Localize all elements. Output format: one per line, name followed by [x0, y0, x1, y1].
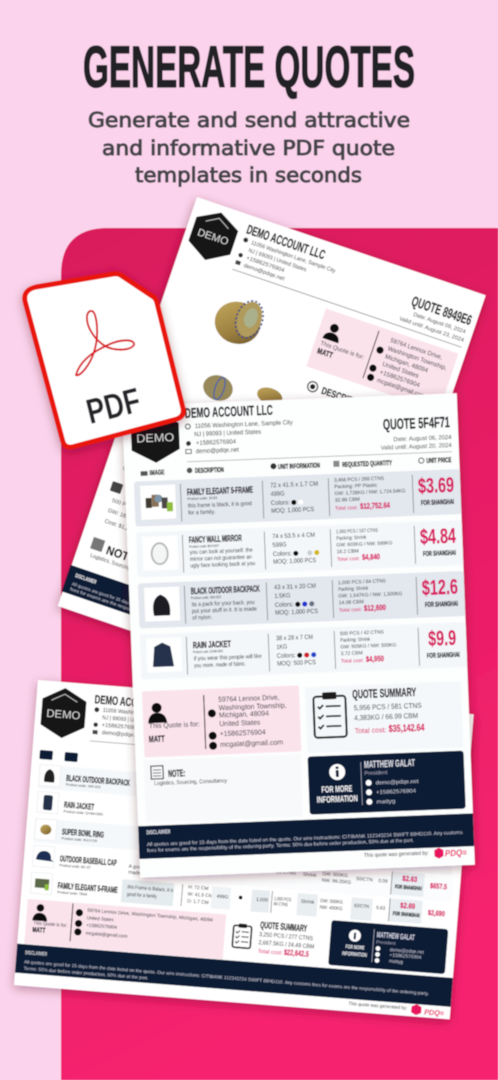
- recipient box: Washington Township,: [387, 345, 448, 372]
- row: cap: $2.63: [402, 874, 418, 884]
- row: cap: GW: 500KG: [322, 871, 348, 879]
- row: family elegant frame: $3.69: [418, 474, 454, 498]
- row: family frame: good for a family: [127, 892, 157, 900]
- footer credit: PDQ≡: [424, 1007, 445, 1018]
- quantity column fragments: GW: 18.5KG: [107, 508, 139, 524]
- row: family frame: 84 CTNS: [274, 901, 288, 908]
- row: family elegant frame: 499G: [270, 491, 285, 498]
- contact card: MATTHEW GALAT: [377, 930, 415, 942]
- row: black outdoor backpack: 1,000 PCS / 84 CTNS: [338, 578, 387, 586]
- row: backpack: BLACK OUTDOOR BACKPACK: [66, 773, 131, 788]
- note: Logistics, Sourcing, Consultancy: [154, 778, 227, 787]
- quote summary: $35,142.64: [388, 723, 425, 735]
- row: family elegant frame: FAMILY ELEGANT 5-FRAME: [187, 485, 253, 497]
- row: fancy wall mirror: [136, 520, 463, 578]
- disclaimer band: Terms: 50% due before order production, 50% due at the port.: [23, 966, 148, 981]
- row: black outdoor backpack: its a pack for your back. you: [192, 600, 255, 608]
- quote summary: 4,383KG / 66.99 CBM: [354, 711, 418, 722]
- row: fancy wall mirror: 74 x 53.5 x 4 CM: [272, 532, 315, 540]
- row: rain jacket: RAIN JACKET: [64, 799, 95, 812]
- disclaimer band: fees for exams are the responsibility of the ordering party.: [69, 586, 189, 631]
- company details: demo@pdqe.net: [243, 263, 286, 283]
- row: rain jacket: 3.72 CBM: [341, 650, 363, 657]
- row: black outdoor backpack: Packing: Shrink: [338, 586, 369, 593]
- row: rain jacket: RAIN JACKET: [193, 639, 231, 650]
- row: rain jacket: GW: 505KG / NW: 500KG: [340, 642, 397, 650]
- row: family frame: 499G: [216, 894, 229, 901]
- row: cap: 28 CTNS: [276, 869, 296, 877]
- disclaimer band: DISCLAIMER: [25, 950, 47, 958]
- row: family elegant frame: FOR SHANGHAI: [421, 499, 454, 507]
- subtitle: [88, 108, 410, 187]
- row: fancy wall mirror: 1,000 PCS / 167 CTNS: [336, 528, 379, 535]
- company details: +15862576904: [196, 438, 237, 447]
- contact card: INFORMATION: [317, 793, 358, 805]
- row: family elegant frame: MOQ: 1,000 PCS: [271, 506, 314, 515]
- quote summary: QUOTE SUMMARY: [352, 685, 416, 701]
- row: black outdoor backpack: of nylon.: [192, 615, 213, 622]
- contact card: INFORMATION: [342, 951, 367, 959]
- row: rain jacket: [37, 791, 105, 818]
- row: cap: NW: 99.25KG: [321, 878, 352, 886]
- company details: DEMO ACCOUNT LLC: [185, 402, 273, 421]
- row: rain jacket: 1KG: [276, 644, 288, 651]
- recipient box: +15862576904: [379, 369, 421, 389]
- company details: [92, 692, 189, 743]
- company details: DEMO ACCOUNT LLC: [94, 692, 177, 713]
- front quote document 5F4F71: [122, 393, 475, 878]
- quantity column fragments: 500 PCS / 84 CTNS: [129, 445, 179, 467]
- row: black outdoor backpack: 43 x 31 x 20 CM: [274, 583, 316, 591]
- row: family elegant frame: [134, 469, 461, 527]
- row: family frame: Shrink: [301, 899, 315, 906]
- row: ring: SUPER BOWL RING: [62, 826, 104, 840]
- row: fancy wall mirror: ugly face looking back at you: [190, 561, 255, 569]
- row: rain jacket: Packing: Shrink: [340, 637, 371, 644]
- recipient box: mcgalat@gmail.com: [85, 931, 128, 940]
- row: black outdoor backpack: MOQ: 1,000 PCS: [275, 608, 318, 617]
- recipient box: Michigan, 48094: [219, 709, 269, 720]
- logo: [130, 410, 180, 464]
- icon: PDF badge: [25, 274, 183, 447]
- description header: [306, 380, 371, 412]
- row: cap: [32, 843, 454, 902]
- quantity column fragments: Cost: $1,250: [122, 466, 154, 482]
- recipient box: This Quote is for:: [319, 341, 365, 361]
- row: cap: OUTDOOR BASEBALL CAP: [59, 853, 117, 868]
- recipient box: +15862576904: [219, 727, 266, 738]
- contact card: [308, 751, 466, 815]
- row: black outdoor backpack: Product code: JKK-023: [191, 595, 221, 600]
- note: Logistics, Sourcing, Consultancy: [89, 553, 160, 582]
- row: family elegant frame: for a family.: [188, 509, 216, 517]
- quote number: Valid until: August 20, 2024: [381, 443, 453, 452]
- company details: 11056 Washington Lane, Sample City: [195, 419, 294, 430]
- subtitle: templates in seconds: [135, 163, 362, 187]
- quote summary: $22,642.5: [284, 948, 310, 959]
- row: rain jacket: 38 x 28 x 7 CM: [276, 634, 313, 642]
- disclaimer band: DISCLAIMER: [146, 829, 171, 836]
- row: family frame: W: 41.5 CM: [187, 891, 213, 899]
- row: family frame: 62/CTN: [354, 903, 370, 910]
- recipient box: +15862576904: [86, 923, 118, 931]
- row: family elegant frame: Packing: PP Plastic: [334, 483, 378, 490]
- row: family frame: this Frame is Balack, it is: [127, 884, 174, 894]
- row: family frame: FOR SHANGHAI: [392, 911, 420, 919]
- recipient box: [24, 899, 226, 959]
- quote summary: [305, 681, 463, 753]
- row: cap: A good hat for outdoors: [128, 864, 181, 874]
- row: fancy wall mirror: mirror can not guarantee an: [190, 555, 252, 563]
- contact card: President: [376, 939, 397, 946]
- row: cap: 50/CTN: [356, 876, 373, 883]
- row: cap: made of cotton: [128, 870, 162, 878]
- disclaimer band: All quotes are good for 15 days from the date listed on the quote. Our wire instructions: CITIBANK 112343234 SWIFT 88HD110. Any customs fees for exams are the responsibility of the ordering party.: [24, 959, 429, 996]
- logo: [40, 686, 87, 740]
- row: fancy wall mirror: $4.84: [420, 525, 457, 549]
- note: NOTE:: [168, 768, 185, 780]
- recipient box: Washington Township,: [218, 701, 287, 712]
- contact card: FOR MORE: [345, 944, 365, 952]
- row: fancy wall mirror: 599G: [272, 541, 287, 549]
- logo: [184, 206, 242, 267]
- row: rain jacket: 500 PCS / 42 CTNS: [340, 629, 385, 637]
- row: black outdoor backpack: Total cost:: [339, 607, 362, 614]
- disclaimer band: fees for exams are the responsibility of the ordering party. Terms: 50% due before order production, 50% due at the port.: [147, 838, 414, 854]
- quote summary: Total cost:: [355, 727, 387, 735]
- quote number: Valid until: August 23, 2024: [398, 316, 465, 344]
- logo: DEMO: [46, 708, 81, 722]
- row: fancy wall mirror: Total cost:: [337, 556, 360, 563]
- row: black outdoor backpack: 14.08 CBM: [339, 599, 364, 606]
- product table: [29, 764, 460, 928]
- row: black outdoor backpack: 1.5KG: [274, 592, 291, 600]
- pink panel: [61, 228, 498, 1080]
- row: family elegant frame: 72 x 41.5 x 1.7 CM: [270, 481, 318, 489]
- footer credit: This quote was generated by:: [348, 1001, 407, 1012]
- row: family frame: 1,000: [256, 897, 269, 904]
- row: family frame: NW: 400KG: [319, 904, 343, 912]
- row: black outdoor backpack: Colors:: [275, 601, 294, 609]
- row: fancy wall mirror: $4,840: [362, 552, 381, 562]
- row: fancy wall mirror: Colors:: [273, 550, 292, 558]
- contact card: mattyg: [389, 958, 404, 966]
- quote number: [380, 414, 453, 452]
- quote summary: Total cost:: [258, 949, 283, 957]
- note: [87, 537, 166, 582]
- contact card: demo@pdqe.net: [376, 779, 419, 787]
- row: fancy wall mirror: GW: 603KG / NW: 599KG: [336, 540, 393, 549]
- product: large ring: [209, 291, 268, 350]
- quantity column fragments: 500 PCS / 84 CTNS: [111, 498, 160, 520]
- recipient box: 59764 Lennox Drive,: [218, 693, 279, 704]
- quote summary: QUOTE SUMMARY: [260, 920, 308, 935]
- row: rain jacket: Product code: QYMH-00G: [193, 649, 223, 654]
- recipient box: MATT: [32, 927, 46, 935]
- row: rain jacket: $4,950: [366, 654, 384, 664]
- logo: DEMO: [136, 432, 175, 445]
- recipient box: United States: [87, 915, 114, 923]
- row: rain jacket: Product code: QYMH-00G: [63, 809, 104, 817]
- company details: NJ | 99093 | United States: [194, 429, 261, 438]
- row: rain jacket: FOR SHANGHAI: [427, 652, 460, 660]
- disclaimer band: [138, 813, 474, 859]
- contact card: [328, 920, 448, 974]
- icon: PDF badge: PDF: [83, 381, 144, 432]
- quote number: Date: August 06, 2024: [393, 435, 452, 443]
- recipient box: Michigan, 48094: [384, 353, 429, 375]
- quote summary: 3,250 PCS / 277 CTNS: [259, 932, 313, 942]
- description header: DESCRIPTION: [320, 386, 371, 412]
- quote number: [398, 291, 474, 344]
- product: smaller rings: [144, 348, 285, 421]
- company details: [234, 222, 342, 297]
- company details: 11056 Washington Lane, Sample City: [103, 708, 188, 720]
- company details: +15862576904: [245, 256, 285, 274]
- row: family frame: FAMILY ELEGANT 5-FRAME: [57, 880, 118, 895]
- recipient box: This Quote is for:: [149, 721, 200, 730]
- company details: [184, 401, 295, 456]
- row: fancy wall mirror: 16.2 CBM: [337, 548, 359, 555]
- row: family elegant frame: Total cost:: [335, 505, 358, 512]
- row: family elegant frame: $12,752.64: [360, 501, 391, 511]
- recipient box: mcgalat@gmail.com: [220, 737, 283, 749]
- company details: demo@pdqe.net: [196, 447, 239, 455]
- recipient box: MATT: [316, 346, 334, 360]
- table header: REQUESTED QUANTITY: [342, 460, 392, 469]
- contact card: President: [364, 770, 388, 777]
- disclaimer band: All quotes are good for 15 days from the date listed on the quote. Our wire instructions: CITIBANK 112343234 SWIFT: [71, 581, 293, 661]
- row: black outdoor backpack: FOR SHANGHAI: [425, 601, 458, 609]
- row: family elegant frame: 32.99 CBM: [335, 497, 360, 504]
- row: family frame: GW: 500KG: [320, 898, 343, 906]
- quote summary: [232, 918, 316, 959]
- row: cap: Product code: BC-07: [59, 863, 91, 870]
- quote number: QUOTE 5F4F71: [383, 414, 450, 434]
- row: family elegant frame: 3,456 PCS / 288 CTNS: [334, 476, 385, 484]
- row: family frame: $2,690: [428, 908, 445, 918]
- row: backpack: Product code: JKK-023: [66, 783, 101, 789]
- row: rain jacket: $9.9: [428, 627, 457, 651]
- row: family elegant frame: Colors:: [271, 499, 290, 507]
- row: cap: Shrink: [303, 872, 317, 879]
- row: family frame: H: 72 CM: [188, 884, 209, 892]
- table header: UNIT INFORMATION: [278, 462, 320, 471]
- contact card: mattyg: [376, 799, 396, 806]
- contact card: MATTHEW GALAT: [364, 758, 415, 771]
- subtitle: Generate and send attractive: [88, 108, 410, 132]
- row: family frame: $2.69: [400, 901, 416, 911]
- quote summary: 2,667.5KG / 24.49 CBM: [258, 940, 315, 950]
- contact card: +15862576904: [389, 952, 422, 961]
- disclaimer band: DISCLAIMER: [74, 573, 97, 586]
- company details: demo@pdqe.net: [101, 730, 143, 739]
- row: fancy wall mirror: FOR SHANGHAI: [423, 550, 456, 558]
- row: rain jacket: Total cost:: [341, 658, 364, 665]
- quantity column fragments: [99, 443, 179, 541]
- footer credit: [364, 847, 467, 862]
- row: cap: $657.5: [430, 881, 447, 891]
- note: [144, 754, 303, 822]
- recipient box: mcgalat@gmail.com: [376, 377, 425, 400]
- note: NOTE:: [104, 543, 141, 567]
- disclaimer band: All quotes are good for 15 days from the date listed on the quote. Our wire instructions: CITIBANK 112343234 SWIFT 88HD110. Any customs: [147, 830, 463, 848]
- row: black outdoor backpack: $12.6: [421, 576, 458, 600]
- logo: DEMO: [196, 226, 230, 248]
- table header: UNIT PRICE: [426, 457, 452, 465]
- quantity column fragments: GW: 18.5KG: [125, 455, 157, 471]
- subtitle: and informative PDF quote: [102, 136, 395, 160]
- recipient box: 59764 Lennox Drive,: [389, 337, 444, 361]
- row: fancy wall mirror: you can look at yourself. the: [190, 548, 253, 556]
- company details: 11056 Washington Lane, Sample City: [250, 240, 336, 275]
- footer credit: [348, 999, 445, 1018]
- row: black outdoor backpack: GW: 1,547KG / NW: 1,500KG: [338, 591, 403, 600]
- row: family frame: 6.63: [376, 905, 386, 912]
- company details: +15862576904: [101, 723, 140, 732]
- row: fancy wall mirror: Packing: Shrink: [336, 535, 367, 542]
- table header: [140, 456, 452, 477]
- footer credit: PDQ≡: [445, 847, 467, 858]
- recipient box: United States: [381, 361, 420, 380]
- row: fancy wall mirror: Product code: BH-5307: [189, 544, 219, 549]
- row: black outdoor backpack: [138, 571, 465, 628]
- row: family frame: D: 1.7 CM: [187, 898, 209, 906]
- row: ring: Product code: KHJ-F2R: [61, 836, 98, 843]
- row: rain jacket: [140, 622, 467, 679]
- bottom quote document: [14, 680, 474, 1019]
- quote number: Date: August 09, 2024: [412, 312, 466, 335]
- row: rain jacket: you more. made of fabric.: [194, 661, 246, 669]
- recipient box: 59764 Lennox Drive, Washington Township, Michigan, 48094: [87, 908, 214, 924]
- row: cap: FOR SHANGHAI: [395, 884, 422, 892]
- contact card: FOR MORE: [321, 783, 353, 795]
- recipient box: [142, 685, 301, 757]
- row: cap: 0.09: [378, 878, 388, 885]
- recipient box: MATT: [149, 734, 165, 744]
- row: rain jacket: MOQ: 500 PCS: [277, 659, 316, 668]
- disclaimer band: [62, 565, 360, 690]
- row: rain jacket: Colors:: [277, 652, 296, 660]
- row: black outdoor backpack: $12,600: [364, 603, 387, 613]
- contact card: +15862576904: [376, 788, 416, 796]
- row: family elegant frame: this frame is black, it is good: [188, 501, 252, 510]
- company details: NJ | 99093 | United States: [247, 248, 307, 273]
- table header: IMAGE: [149, 469, 165, 477]
- row: fancy wall mirror: FANCY WALL MIRROR: [189, 533, 242, 545]
- back quote document 8949E6: [57, 197, 486, 704]
- table header: DESCRIPTION: [195, 467, 224, 475]
- quote summary: 5,956 PCS / 581 CTNS: [354, 701, 422, 712]
- row: family elegant frame: Product code: 10-83: [187, 496, 217, 501]
- footer credit: This quote was generated by:: [364, 851, 429, 859]
- row: fancy wall mirror: MOQ: 1,000 PCS: [273, 557, 316, 566]
- row: black outdoor backpack: BLACK OUTDOOR BACKPACK: [191, 584, 260, 596]
- column header icons: [39, 750, 78, 762]
- company details: NJ | 99093 | United States: [102, 715, 160, 726]
- row: family frame: [30, 870, 446, 928]
- row: family frame: 1,000 PCS: [274, 896, 291, 903]
- company details: DEMO ACCOUNT LLC: [245, 222, 328, 262]
- quantity column fragments: Cost: $1,250: [104, 519, 136, 534]
- recipient box: [306, 309, 458, 411]
- row: backpack: [38, 764, 458, 821]
- recipient box: This Quote is for:: [33, 920, 68, 929]
- row: ring: [33, 818, 454, 875]
- row: family frame: Product code: TB48: [57, 890, 87, 897]
- contact card: demo@pdqe.net: [390, 947, 425, 956]
- row: black outdoor backpack: put your stuff in it. It is made: [192, 606, 257, 615]
- row: family elegant frame: GW: 1,728KG / NW: 1,724.54KG: [334, 488, 406, 497]
- row: rain jacket: if you wear this people will like: [194, 654, 262, 662]
- recipient box: United States: [219, 718, 261, 728]
- disclaimer band: [15, 944, 453, 1007]
